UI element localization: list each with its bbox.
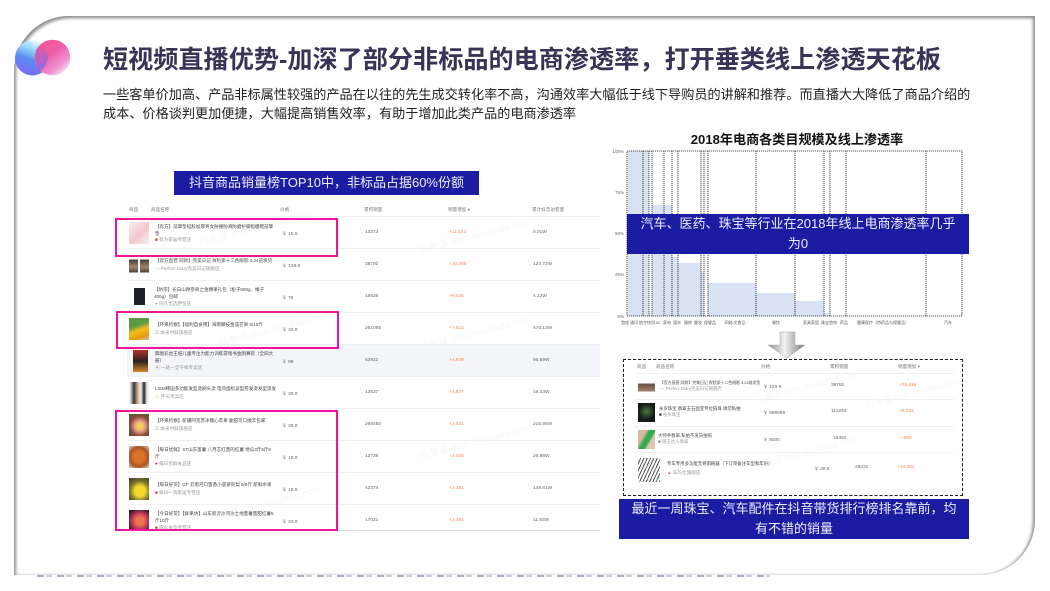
title: 短视频直播优势-加深了部分非标品的电商渗透率，打开垂类线上渗透天花板 xyxy=(103,46,941,74)
row 4 xyxy=(638,458,914,482)
row 1: 【官方直营 同款】完美日记 探险家十二色眼影 3.24前发货 xyxy=(660,380,760,385)
row 1 xyxy=(634,374,954,400)
row 2 xyxy=(634,400,954,427)
row 10: ■ 阳众食品专营店 xyxy=(155,525,191,530)
row 5 xyxy=(127,345,600,377)
row 6: 13537 xyxy=(365,390,378,395)
table header: 价格 xyxy=(280,207,289,212)
x axis labels: 家具家居 xyxy=(803,319,819,325)
table header: 累积销量 xyxy=(830,364,848,369)
table header: 商品名称 xyxy=(656,364,674,369)
row 1: 13373 xyxy=(365,230,378,235)
x axis labels: 快消 xyxy=(647,319,655,325)
icon: gradient logo xyxy=(15,40,70,76)
row 9: 42374 xyxy=(365,486,378,491)
row 3: ■ 翔玉达人翡翠 xyxy=(658,439,688,444)
row 1: +11,523 xyxy=(449,230,466,235)
x axis labels: 健康医疗（特药品与保健品） xyxy=(857,319,909,325)
row 3: ● 同凡优选伊贸店 xyxy=(155,301,191,306)
row 3: 大师手翡翠.私拍不发货拍照 xyxy=(658,433,712,438)
x axis labels xyxy=(621,319,952,325)
row 4: ￥ 33.9 xyxy=(282,328,297,333)
panel: douyin top 10 table: 抖参谋 dcm.doudada.com xyxy=(418,216,532,257)
row 6: ￥ 39.9 xyxy=(282,392,297,397)
row 9: +3,381 xyxy=(449,486,464,491)
arrow: down xyxy=(768,332,805,358)
row 3: +9,425 xyxy=(449,294,464,299)
row 8: ● 每日优鲜食品店 xyxy=(155,461,191,466)
table header: 累计抖音访客量 xyxy=(532,207,564,212)
row 9: 148.61W xyxy=(533,486,552,491)
banner: recent sales: 最近一周珠宝、汽车配件在抖音带货排行榜排名靠前，均 xyxy=(631,501,956,516)
y axis labels: 25% xyxy=(615,272,624,277)
row 6: △ 怀天专卖店 xyxy=(155,394,184,399)
row 2: 113264 xyxy=(831,409,847,414)
row 9 xyxy=(127,473,600,505)
row 1: ￥ 129.9 xyxy=(763,385,781,390)
row 4: 478.13W xyxy=(533,326,552,331)
row 4: 专车专用多功能无骨雨刷器（下订单备注车型和年份） xyxy=(667,461,772,466)
row 4: +7,614 xyxy=(449,326,464,331)
panel: douyin top 10 table: 抖参谋 dcm.doudada.com xyxy=(198,209,312,250)
y axis labels: 100% xyxy=(612,149,624,154)
intro text: 成本、价格谈判更加便捷，大幅提高销售效率，有助于增加此类产品的电商渗透率 xyxy=(103,106,576,121)
row 10: ￥ 23.9 xyxy=(282,520,297,525)
row 5: 96.89W xyxy=(533,358,550,363)
row 1: 0.01W xyxy=(533,230,547,235)
x axis labels: 服饰 xyxy=(684,319,692,325)
row 8: 12739 xyxy=(365,454,378,459)
x axis labels: 珠宝首饰 xyxy=(821,319,837,325)
row 5: 典图彩虎王纸儿童专注力能力训练游戏书金刚赛装（全四大册） xyxy=(155,351,273,363)
row 3: ￥ 8000 xyxy=(763,438,780,443)
row 8: +3,455 xyxy=(449,454,464,459)
row 4: ￥ 39.9 xyxy=(814,467,829,472)
panel: recent ranking table: 抖参谋 dcm.doudada.com xyxy=(755,434,857,470)
panel: recent ranking table xyxy=(623,359,963,496)
row 2: ■ 永岁珠宝 xyxy=(659,412,680,417)
row 4: ☰ 本采时鲜旗舰店 xyxy=(155,330,193,335)
row 3 xyxy=(127,281,600,313)
row 10 xyxy=(129,510,550,530)
row 2: 永岁珠宝 翡翠玉石面莹专拉链珠 请勿私拍 xyxy=(659,406,740,411)
y axis labels xyxy=(612,149,624,319)
row 1: +25,818 xyxy=(899,383,916,388)
row 6: +4,827 xyxy=(449,390,464,395)
row 4: ▲ 车玛仕旗舰店 xyxy=(667,470,700,475)
row 2: 124.72W xyxy=(533,262,552,267)
panel: douyin top 10 table xyxy=(127,205,600,531)
row 3: 16462 xyxy=(833,436,846,441)
row 5: ￥ 99 xyxy=(282,360,293,365)
row 4 xyxy=(127,313,600,345)
table header: 销量增加 ▾ xyxy=(898,364,920,369)
y axis labels: 50% xyxy=(615,231,624,236)
panel: douyin top 10 table: 抖参谋 dcm.doudada.com xyxy=(208,484,322,525)
row 1: 【有方】前掌垫硅胶加厚男女防撞防滑防磨护脚指膜鞋前掌垫 xyxy=(155,224,273,236)
row 5: ▣ 一班一全干每专卖店 xyxy=(155,365,202,370)
table header xyxy=(127,205,600,217)
row 1: ￥ 15.6 xyxy=(282,232,297,237)
x axis labels: 美妆 xyxy=(694,319,702,325)
intro text xyxy=(103,87,970,121)
panel: douyin top 10 table: 抖参谋 dcm.doudada.com xyxy=(418,422,532,463)
x axis labels: 药品 xyxy=(840,319,848,325)
row 4: +10,551 xyxy=(897,465,914,470)
x axis labels: 3C xyxy=(655,320,661,325)
x axis labels: 家电 xyxy=(663,319,671,325)
panel: douyin top 10 table: 抖参谋 dcm.doudada.com xyxy=(418,314,532,355)
row 1 xyxy=(127,217,600,249)
row 3: 15635 xyxy=(365,294,378,299)
highlight box: rows 7 to 10 xyxy=(115,410,338,531)
row 1: — Perfect Diary完美日记旗舰店 xyxy=(660,386,722,391)
row 2: 38792 xyxy=(365,262,378,267)
row 1: ■ 有为家居专营店 xyxy=(155,237,191,242)
row 8: 26.86W xyxy=(533,454,550,459)
x axis labels: 通讯 xyxy=(630,319,638,325)
table header: 商品名称 xyxy=(151,207,169,212)
x axis labels: 游戏 xyxy=(621,319,629,325)
row 10: 17031 xyxy=(365,518,378,523)
row 8: ￥ 19.9 xyxy=(282,456,297,461)
row 6 xyxy=(127,377,600,409)
row 2: +10,285 xyxy=(449,262,466,267)
row 2 xyxy=(127,249,600,281)
row 3: ￥ 79 xyxy=(282,296,293,301)
x axis labels: 印刷/文食品 xyxy=(724,319,746,325)
row 3: +994 xyxy=(901,436,912,441)
table header: 商品 xyxy=(129,207,138,212)
y axis labels: 0% xyxy=(617,314,624,319)
table header: 价格 xyxy=(761,364,770,369)
x axis labels: 保健品 xyxy=(704,319,716,325)
highlight box: row 1 xyxy=(115,218,338,257)
banner: low penetration: 为0 xyxy=(788,236,808,251)
row 2: ￥ 999999 xyxy=(763,411,785,416)
y axis labels: 75% xyxy=(615,190,624,195)
row 7: 216.65W xyxy=(533,422,552,427)
intro text: 一些客单价加高、产品非标属性较强的产品在以往的先生成交转化率不高，沟通效率大幅低于线下导购员的讲解和推荐。而直播大大降低了商品介绍的 xyxy=(103,87,970,102)
x axis labels: 酒水 xyxy=(673,319,681,325)
row 5: 63932 xyxy=(365,358,378,363)
table header: 销量增加 ▾ xyxy=(448,207,470,212)
row 1: 38792 xyxy=(831,383,844,388)
row 6: LISM韩国多功能发型烫刷头烫 电热蛋松波型卷发烫发型烫发 xyxy=(155,386,276,391)
row 7: +3,821 xyxy=(449,422,464,427)
row 2: ￥ 129.9 xyxy=(282,264,300,269)
row 8: 【每日优鲜】XT山东蜜薯 八月芯红蜜的红薯 地瓜3斤5斤9斤 xyxy=(155,447,271,459)
row 8 xyxy=(127,441,600,473)
banner: low penetration xyxy=(627,214,969,254)
table header xyxy=(634,362,954,374)
row 10: +3,354 xyxy=(449,518,464,523)
x axis labels: 航空 xyxy=(639,319,647,325)
row 10: 【今日好货】【鲜果坊】山东新沂沙河沙土地蜜薯蜜甜红薯5斤10斤 xyxy=(155,511,273,523)
banner: top 10 share: 抖音商品销量榜TOP10中，非标品占据60%份额 xyxy=(189,175,464,190)
row 9: ￥ 19.9 xyxy=(282,488,297,493)
chart bars xyxy=(628,151,830,316)
banner: low penetration: 汽车、医药、珠宝等行业在2018年线上电商渗透率几乎 xyxy=(641,216,955,231)
chart title: 2018年电商各类目规模及线上渗透率 xyxy=(691,132,903,147)
marimekko chart xyxy=(612,149,962,325)
cropped source note strip xyxy=(37,575,770,577)
row 4: 261095 xyxy=(365,326,381,331)
x axis labels: 餐饮 xyxy=(772,319,780,325)
row 7: 269480 xyxy=(365,422,381,427)
row 4: 28231 xyxy=(855,465,868,470)
row 5: +4,849 xyxy=(449,358,464,363)
panel: douyin top 10 table: 抖参谋 dcm.doudada.com xyxy=(218,309,332,350)
row 3: 【防宗】长白山德参商之金稞果礼包（松子500g、榛子400g）包邮 xyxy=(154,287,264,299)
row 2: 【官方直营 同款】完美日记 探险家十二色眼影 3.24前发货 xyxy=(155,258,272,263)
banner: top 10 share xyxy=(174,171,479,195)
x axis labels: 汽车 xyxy=(944,319,952,325)
panel: recent ranking table: 抖参谋 dcm.doudada.com xyxy=(755,369,857,405)
row 3 xyxy=(634,427,954,453)
row 7 xyxy=(127,409,600,441)
row 2: +6,222 xyxy=(899,409,914,414)
row 7: ☰ 本采时鲜旗舰店 xyxy=(155,426,193,431)
row 9: ■ 每日一淘家居专营店 xyxy=(155,490,200,495)
chart grid lines xyxy=(627,151,962,316)
row 6: 16.33W xyxy=(533,390,550,395)
row 9: 【每日好货】GF 云南河口蜜香小菠萝风梨 5/9斤 新鲜水果 xyxy=(155,482,271,487)
row 7: 【环果检察】新疆阿克苏冰糖心苹果 脆甜可口顺丰包邮 xyxy=(155,418,265,423)
table header: 累积销量 xyxy=(364,207,382,212)
row 7: ￥ 29.9 xyxy=(282,424,297,429)
row 4: 【环果检察】【福利自食用】海南攀枝金庙芒果 5/10斤 xyxy=(155,322,263,327)
banner: recent sales: 有不错的销量 xyxy=(755,521,833,536)
highlight box: row 4 xyxy=(116,311,339,349)
row 10: 11.93W xyxy=(533,518,549,523)
row 3: 4.12W xyxy=(533,294,547,299)
table header: 商品 xyxy=(637,364,646,369)
row 2: — Perfect Diary完美日记旗舰店 xyxy=(155,266,220,271)
banner: recent sales xyxy=(619,499,969,539)
